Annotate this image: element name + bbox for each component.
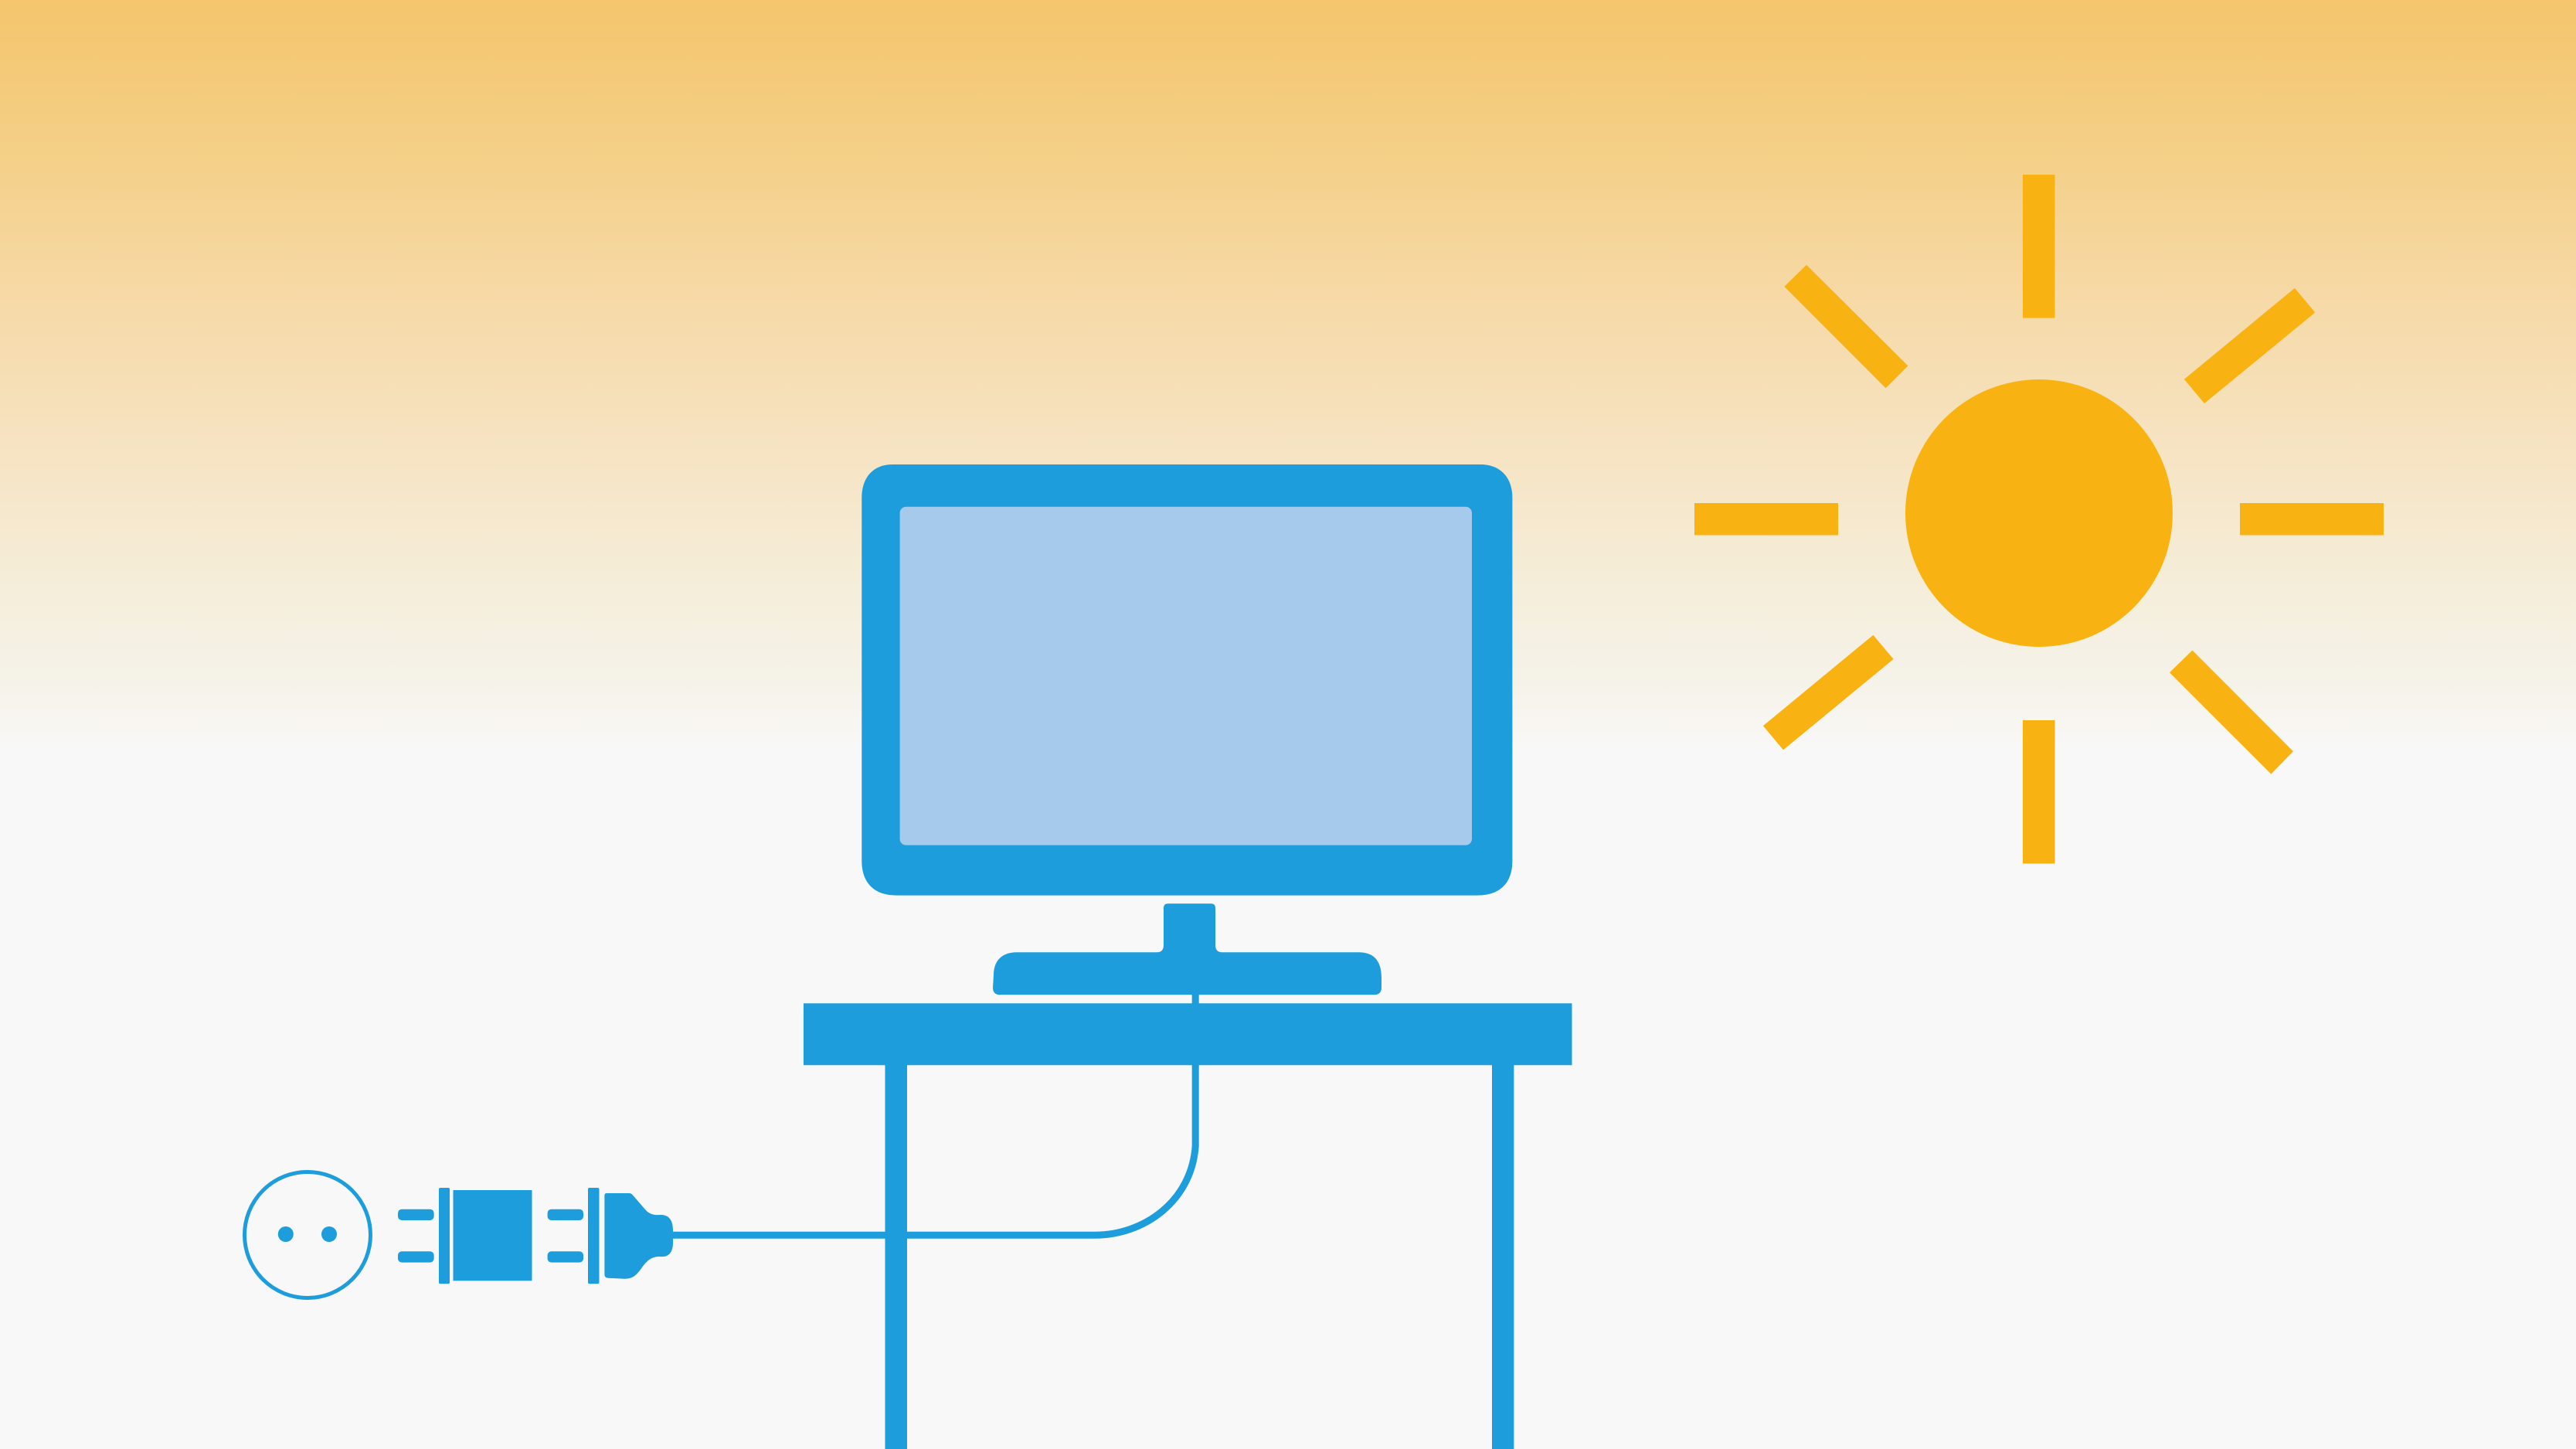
cable: from monitor stand behind desk to plug: [671, 993, 1195, 1235]
sun ray: lower right: [2170, 651, 2293, 774]
adapter prong: upper: [398, 1209, 434, 1220]
icon: sun: [1694, 175, 2384, 864]
monitor stand: [993, 903, 1381, 995]
socket ring: [244, 1172, 371, 1298]
adapter plate: [439, 1188, 450, 1284]
plug prong: lower: [548, 1251, 583, 1263]
sun ray: upper left: [1784, 265, 1908, 388]
icon: adapter: [398, 1188, 532, 1284]
sun ray: top: [2023, 175, 2055, 318]
plug body: [604, 1193, 673, 1279]
sun ray: left: [1694, 503, 1838, 535]
socket hole: left: [278, 1226, 294, 1242]
plug prong: upper: [548, 1209, 583, 1220]
adapter prong: lower: [398, 1251, 434, 1263]
icon: wall socket: [244, 1172, 371, 1298]
sun ray: lower left: [1763, 635, 1894, 750]
computer monitor: [861, 464, 1512, 995]
desk leg: right: [1492, 1065, 1514, 1449]
icon: plug: [548, 1188, 673, 1284]
sun ray: bottom: [2023, 720, 2055, 864]
desk top: [804, 1003, 1572, 1065]
sun ray: right: [2240, 503, 2384, 535]
monitor frame: [861, 464, 1512, 896]
plug plate: [588, 1188, 600, 1284]
socket hole: right: [321, 1226, 337, 1242]
sun disc: [1905, 379, 2173, 647]
desk leg: left: [885, 1065, 907, 1449]
sun ray: upper right: [2184, 288, 2315, 403]
adapter body: [453, 1190, 532, 1281]
desk: [804, 1003, 1572, 1449]
monitor screen: [900, 507, 1472, 845]
